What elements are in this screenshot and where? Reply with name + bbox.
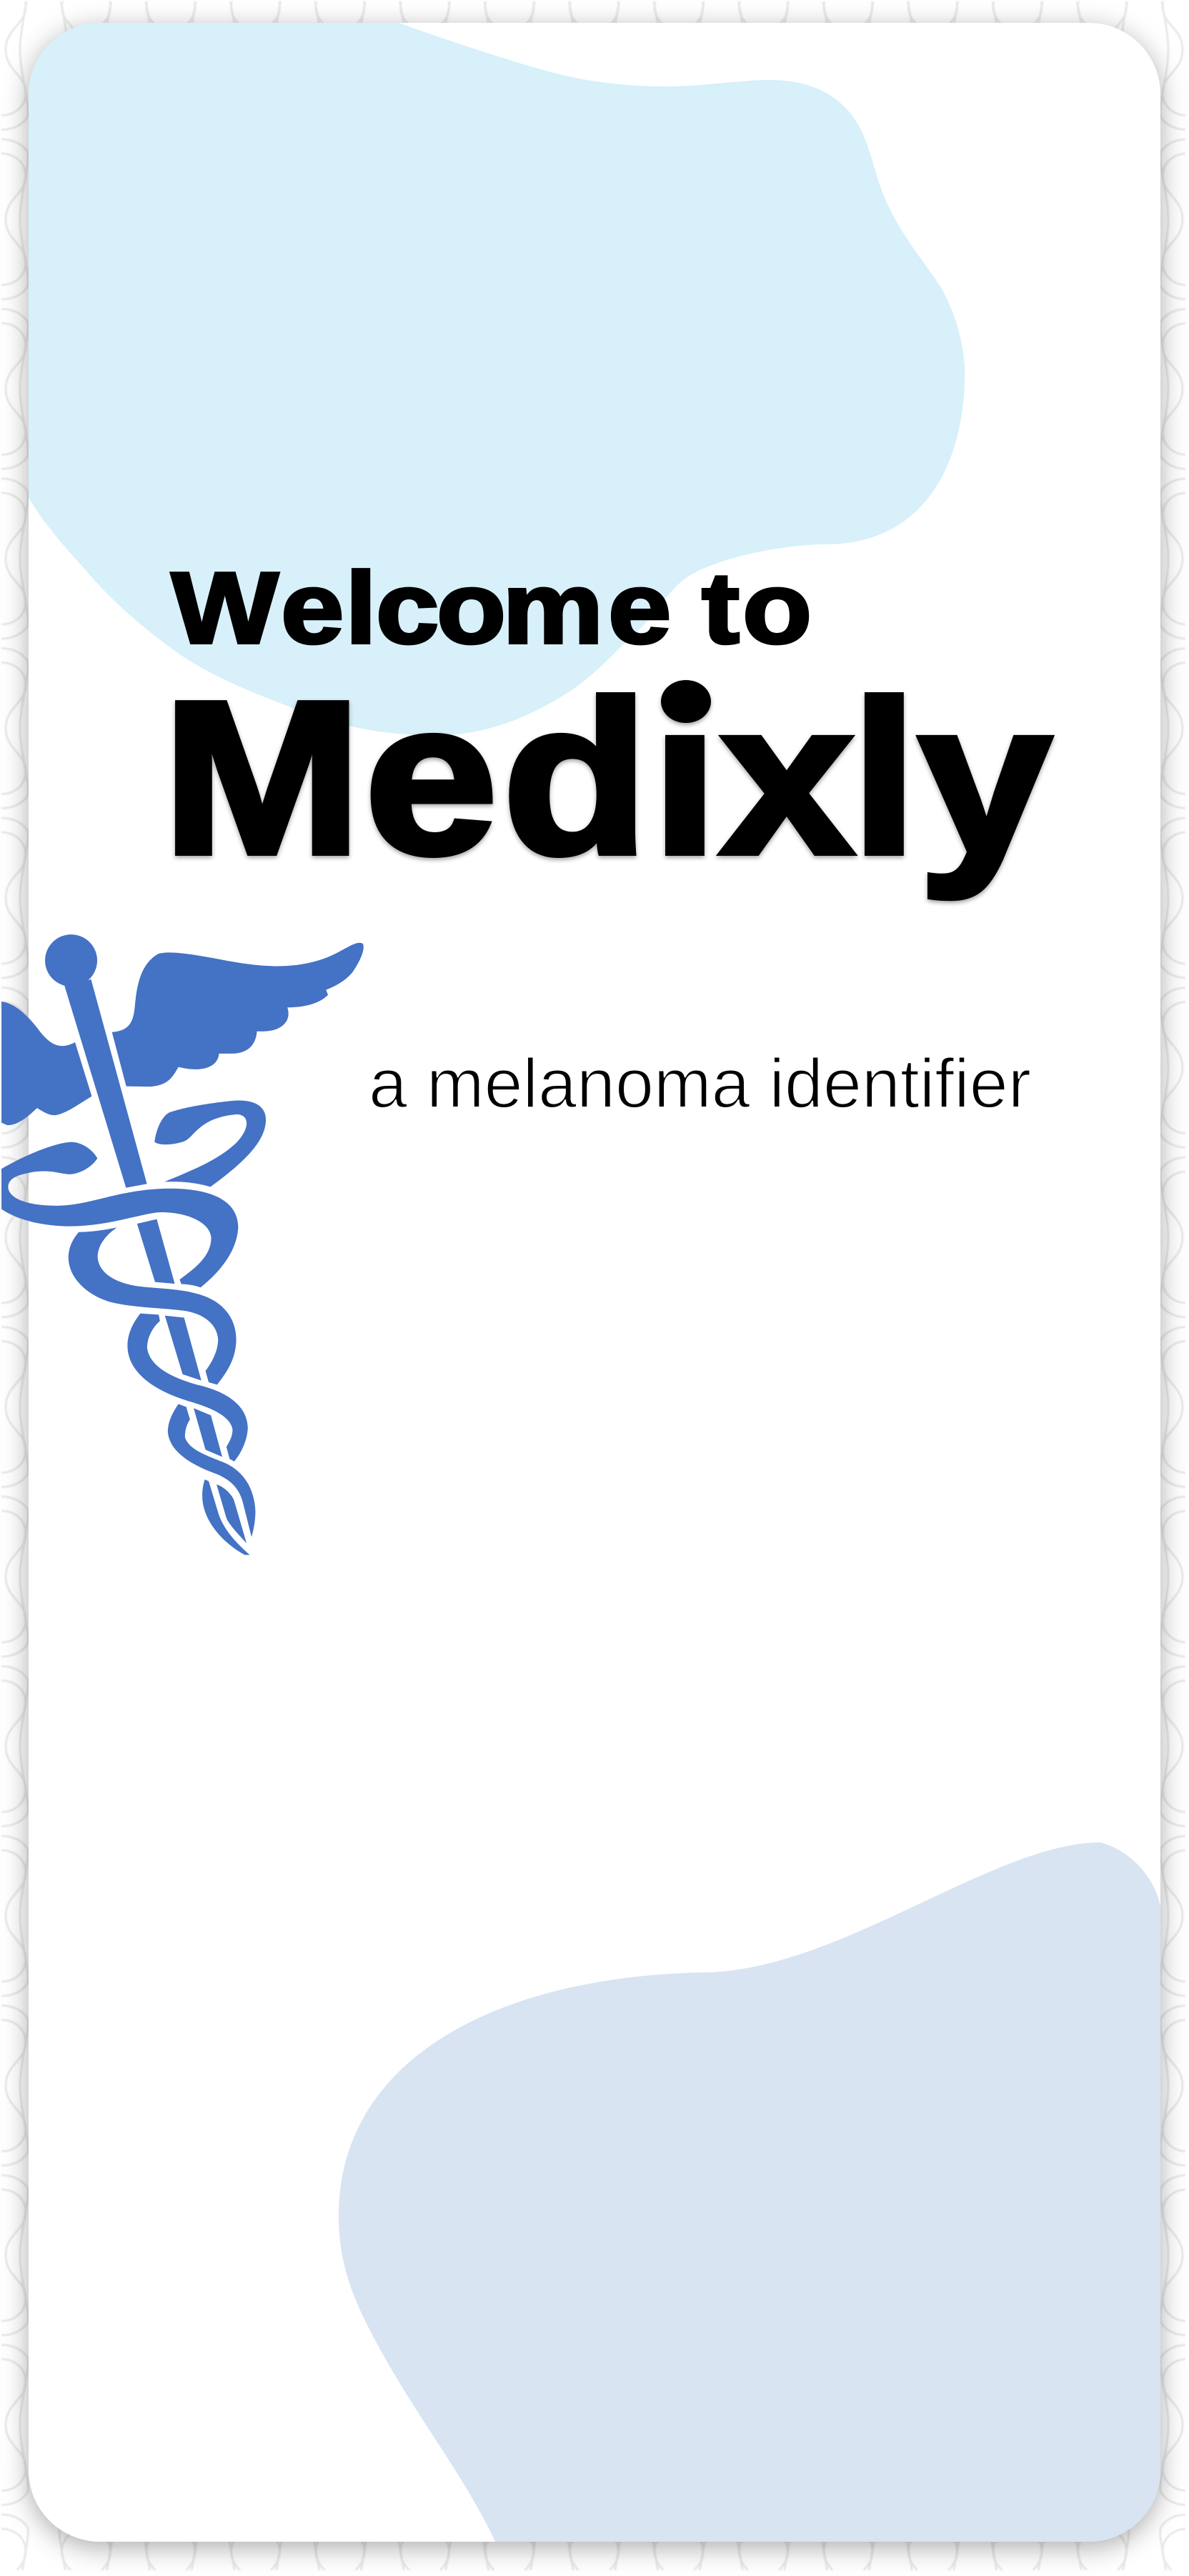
staff segments	[64, 979, 222, 1457]
subtitle: a melanoma identifier	[369, 1044, 1031, 1122]
round i dot	[661, 680, 711, 723]
left wing	[1, 1002, 91, 1125]
snake first band	[1, 1142, 238, 1287]
title	[162, 551, 1053, 901]
snake fourth band	[168, 1404, 255, 1537]
cover for square i dot	[660, 684, 712, 732]
snake upper coil	[154, 1100, 266, 1187]
icon: caduceus logo	[1, 934, 364, 1555]
staff tip	[217, 1484, 247, 1543]
heading: Medixly: Medixly	[162, 656, 1053, 901]
snake second band	[69, 1227, 237, 1384]
staff knob	[45, 934, 97, 987]
snake tail	[202, 1479, 250, 1555]
top light blue blob	[29, 14, 965, 735]
right wing	[112, 943, 364, 1087]
bottom pale blue blob	[339, 1842, 1172, 2550]
heading: Welcome to: Welcome to	[171, 551, 812, 664]
snake third band	[127, 1314, 248, 1462]
